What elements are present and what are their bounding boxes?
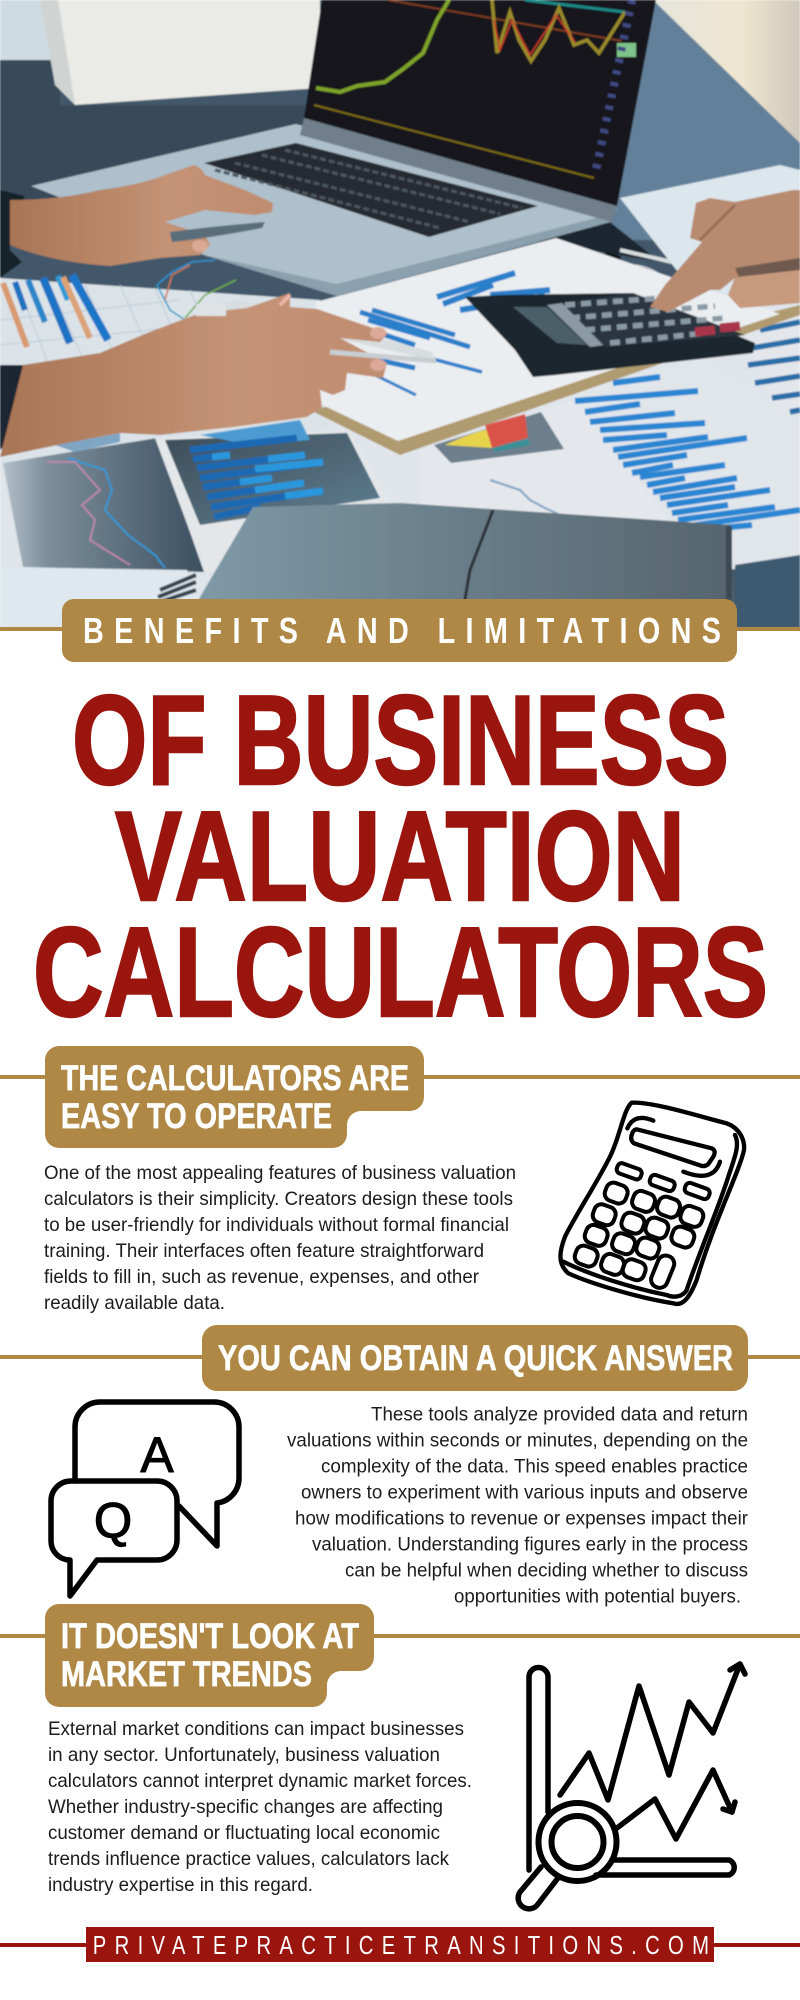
text block: quick answer: how modifications to revenue or expenses impact their bbox=[295, 1508, 748, 1530]
footer: website banner: PRIVATEPRACTICETRANSITIONS.COM bbox=[93, 1931, 709, 1960]
left paper with gantt bars and line chart bbox=[0, 258, 237, 361]
second sheet with blue bars bbox=[56, 419, 380, 529]
heading: it doesn't look at market trends: IT DOESN'T LOOK AT bbox=[61, 1617, 359, 1656]
lower-left hand with pen bbox=[0, 293, 436, 457]
text block: quick answer: opportunities with potential buyers. bbox=[454, 1586, 741, 1608]
white spiral notebook bbox=[63, 567, 198, 599]
heading: the calculators are easy to operate: EASY TO OPERATE bbox=[61, 1097, 332, 1136]
text block: quick answer: These tools analyze provided data and return bbox=[371, 1404, 748, 1426]
text block: easy to operate: to be user-friendly for individuals without formal financial bbox=[44, 1214, 509, 1236]
section 1 rule bbox=[0, 1075, 800, 1079]
heading: it doesn't look at market trends bbox=[45, 1604, 374, 1707]
notebook bbox=[198, 502, 734, 602]
text block: easy to operate: One of the most appealing features of business valuation bbox=[44, 1162, 516, 1184]
right sheet with blue bar chart bbox=[490, 318, 800, 531]
dark desk at bottom right bbox=[734, 554, 800, 570]
footer rule bbox=[0, 1943, 800, 1947]
icon: question and answer speech bubbles: A bbox=[140, 1427, 174, 1483]
heading: the calculators are easy to operate: THE CALCULATORS ARE bbox=[61, 1059, 409, 1098]
text block: quick answer: can be helpful when deciding whether to discuss bbox=[345, 1560, 748, 1582]
text block: market trends: customer demand or fluctuating local economic bbox=[48, 1822, 440, 1844]
icon: chart with magnifying glass and trend arrows bbox=[518, 1664, 745, 1909]
text block: easy to operate: training. Their interfaces often feature straightforward bbox=[44, 1240, 484, 1262]
right hand pressing calculator keys bbox=[650, 190, 800, 312]
section 3 rule bbox=[0, 1634, 800, 1638]
text block: market trends: industry expertise in this regard. bbox=[48, 1874, 313, 1896]
desk bbox=[0, 0, 800, 628]
banner: benefits and limitations bbox=[62, 599, 737, 662]
heading: the calculators are easy to operate bbox=[45, 1046, 424, 1148]
banner: benefits and limitations: BENEFITS AND LIMITATIONS bbox=[83, 610, 721, 651]
photo: hands working with laptop, calculator and financial charts bbox=[0, 0, 800, 628]
icon: calculator bbox=[560, 1103, 744, 1304]
text block: market trends bbox=[48, 1718, 472, 1896]
laptop screen bbox=[300, 0, 656, 222]
text block: market trends: Whether industry-specific changes are affecting bbox=[48, 1796, 443, 1818]
lower paper base bbox=[0, 332, 800, 599]
text block: quick answer: owners to experiment with various inputs and observe bbox=[301, 1482, 748, 1504]
clipboard with charts bbox=[310, 238, 800, 455]
text block: market trends: calculators cannot interpret dynamic market forces. bbox=[48, 1770, 472, 1792]
text block: quick answer: valuations within seconds or minutes, depending on the bbox=[287, 1430, 748, 1452]
text block: quick answer: complexity of the data. This speed enables practice bbox=[321, 1456, 748, 1478]
icon: question and answer speech bubbles bbox=[51, 1402, 239, 1596]
laptop base bbox=[31, 124, 617, 296]
title bbox=[33, 669, 768, 1043]
paper behind laptop right bbox=[620, 164, 800, 308]
window background bbox=[653, 0, 800, 143]
text block: easy to operate bbox=[44, 1162, 516, 1314]
pie chart bbox=[434, 412, 564, 463]
heading: it doesn't look at market trends: MARKET TRENDS bbox=[61, 1655, 312, 1694]
icon: question and answer speech bubbles: Q bbox=[94, 1494, 132, 1548]
text block: market trends: trends influence practice values, calculators lack bbox=[48, 1848, 449, 1870]
text block: easy to operate: fields to fill in, such as revenue, expenses, and other bbox=[44, 1266, 479, 1288]
calculator in photo bbox=[465, 293, 755, 377]
section 2 rule bbox=[0, 1355, 800, 1359]
text block: easy to operate: readily available data. bbox=[44, 1292, 225, 1314]
dark chart sheet bbox=[3, 438, 204, 572]
text block: easy to operate: calculators is their simplicity. Creators design these tools bbox=[44, 1188, 513, 1210]
white box bbox=[0, 0, 320, 105]
gold rule under photo bbox=[0, 627, 800, 631]
text block: quick answer: valuation. Understanding figures early in the process bbox=[312, 1534, 748, 1556]
text block: market trends: External market conditions can impact businesses bbox=[48, 1718, 464, 1740]
heading: you can obtain a quick answer bbox=[202, 1325, 748, 1391]
text block: quick answer bbox=[287, 1404, 748, 1608]
text block: market trends: in any sector. Unfortunately, business valuation bbox=[48, 1744, 440, 1766]
upper-left hand bbox=[0, 165, 273, 278]
dark gap under laptop with cable bbox=[540, 222, 672, 273]
